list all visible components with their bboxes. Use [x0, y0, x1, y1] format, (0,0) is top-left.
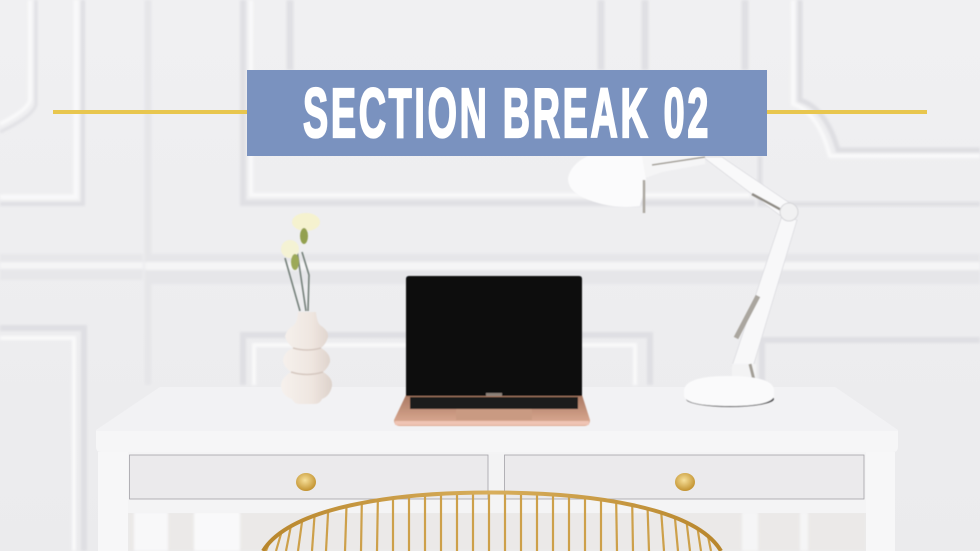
pilaster edge: [144, 0, 152, 385]
table: [96, 387, 898, 551]
right drawer: [504, 455, 864, 499]
lamp pull: [643, 180, 645, 213]
decorative yellow line left: [53, 110, 247, 114]
lamp lower arm: [732, 216, 797, 370]
trackpad: [456, 409, 532, 420]
chair rail: [0, 254, 980, 284]
vase: [281, 312, 332, 404]
stems: [285, 244, 309, 311]
decorative yellow line right: [767, 110, 927, 114]
lamp joint: [780, 203, 798, 221]
flowers: [281, 213, 320, 270]
chair: [263, 491, 721, 551]
lamp base shadow: [686, 391, 774, 407]
lamp spring: [736, 296, 758, 338]
keyboard: [410, 397, 578, 409]
under-table wall and stripes: [128, 512, 866, 551]
lamp base: [684, 376, 774, 406]
laptop base: [394, 395, 590, 426]
chair rim: [263, 492, 721, 551]
laptop: [394, 276, 590, 426]
upper right moulding: [760, 0, 980, 204]
left knob: [296, 473, 316, 491]
upper left moulding: [0, 0, 83, 204]
table top surface: [96, 387, 898, 433]
lamp upper arm: [703, 157, 797, 220]
table front edge: [96, 431, 898, 452]
table legs: [98, 452, 895, 551]
left drawer: [130, 455, 488, 499]
chair spokes: [266, 491, 711, 551]
lamp shade: [568, 156, 646, 207]
title banner: [247, 70, 767, 156]
laptop logo label: [486, 393, 502, 396]
drawer gap: [488, 454, 505, 500]
lamp bracket: [640, 156, 705, 178]
lower panels moulding: [0, 328, 980, 551]
upper centre panel moulding: [243, 0, 755, 203]
right knob: [675, 473, 695, 491]
laptop screen: [406, 276, 582, 396]
lamp neck: [732, 364, 756, 380]
desk lamp: [568, 156, 798, 407]
vase with flowers: [281, 213, 332, 404]
laptop front edge: [395, 421, 589, 425]
table apron: [128, 452, 866, 513]
